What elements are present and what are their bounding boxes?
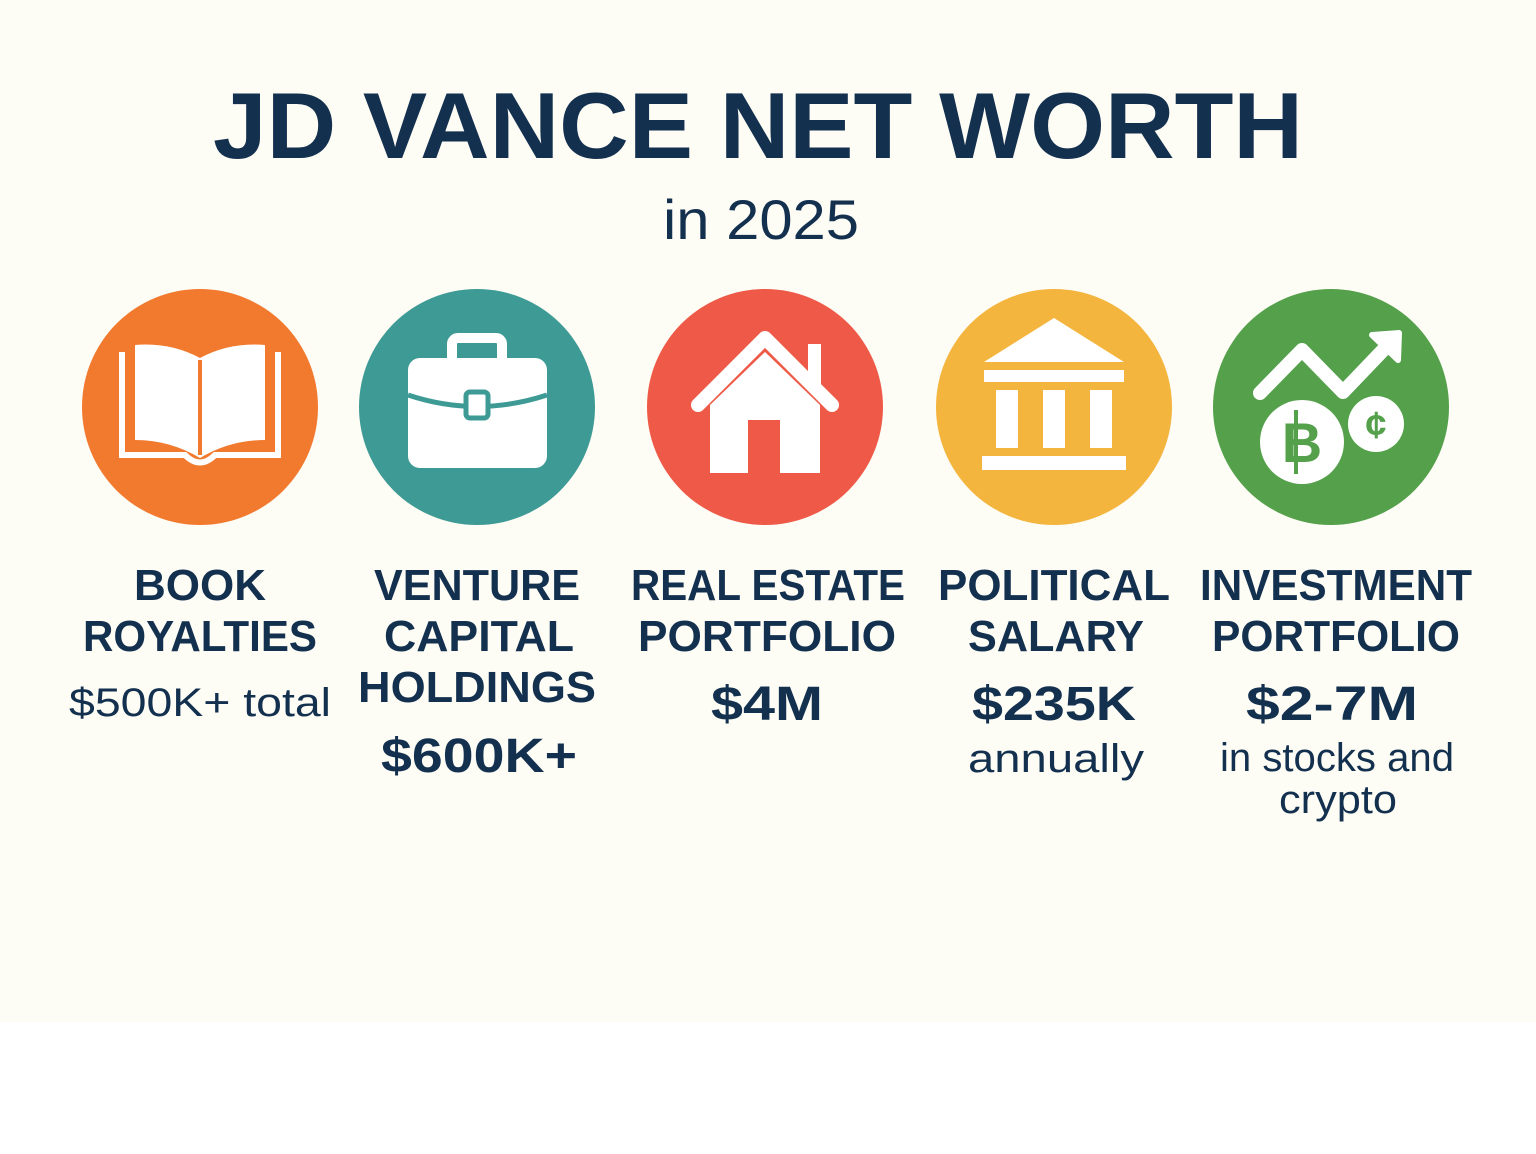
- subtitle: in 2025: [663, 188, 859, 251]
- text: real estate: [631, 561, 905, 731]
- text: real estate: REAL ESTATE: [631, 561, 905, 610]
- icon: government building: [936, 289, 1172, 525]
- text: book royalties: $500K+ total: [69, 681, 331, 725]
- text: venture capital: [358, 561, 596, 783]
- panel: investment portfolio: [1200, 289, 1472, 822]
- text: investment portfolio: in stocks and: [1220, 736, 1454, 780]
- panel: venture capital: [358, 289, 596, 783]
- icon: briefcase: [359, 289, 595, 525]
- text: investment portfolio: PORTFOLIO: [1212, 612, 1460, 661]
- icon: chart and coins: [1213, 289, 1449, 525]
- text: venture capital: HOLDINGS: [358, 663, 596, 712]
- text: book royalties: [69, 561, 331, 725]
- text: book royalties: BOOK: [134, 561, 266, 610]
- panel: real estate: [631, 289, 905, 731]
- text: political salary: [938, 561, 1170, 781]
- text: political salary: annually: [968, 737, 1144, 781]
- text: political salary: $235K: [972, 678, 1136, 731]
- text: investment portfolio: INVESTMENT: [1200, 561, 1472, 610]
- icon: open book: [82, 289, 318, 525]
- text: real estate: $4M: [711, 678, 823, 731]
- icon: chart and coins: B: [1282, 411, 1322, 474]
- text: investment portfolio: $2-7M: [1246, 678, 1418, 731]
- panel: political salary: [936, 289, 1172, 781]
- icon: chart and coins: ¢: [1365, 405, 1387, 447]
- text: real estate: PORTFOLIO: [638, 612, 896, 661]
- text: venture capital: CAPITAL: [384, 612, 574, 661]
- text: venture capital: VENTURE: [374, 561, 580, 610]
- text: political salary: POLITICAL: [938, 561, 1170, 610]
- icon: house: [647, 289, 883, 525]
- text: investment portfolio: [1200, 561, 1472, 822]
- title: JD VANCE NET WORTH: [213, 73, 1303, 178]
- text: book royalties: ROYALTIES: [83, 612, 317, 661]
- text: investment portfolio: crypto: [1279, 778, 1397, 822]
- text: venture capital: $600K+: [381, 730, 577, 783]
- panel: book royalties: [69, 289, 331, 725]
- text: political salary: SALARY: [968, 612, 1144, 661]
